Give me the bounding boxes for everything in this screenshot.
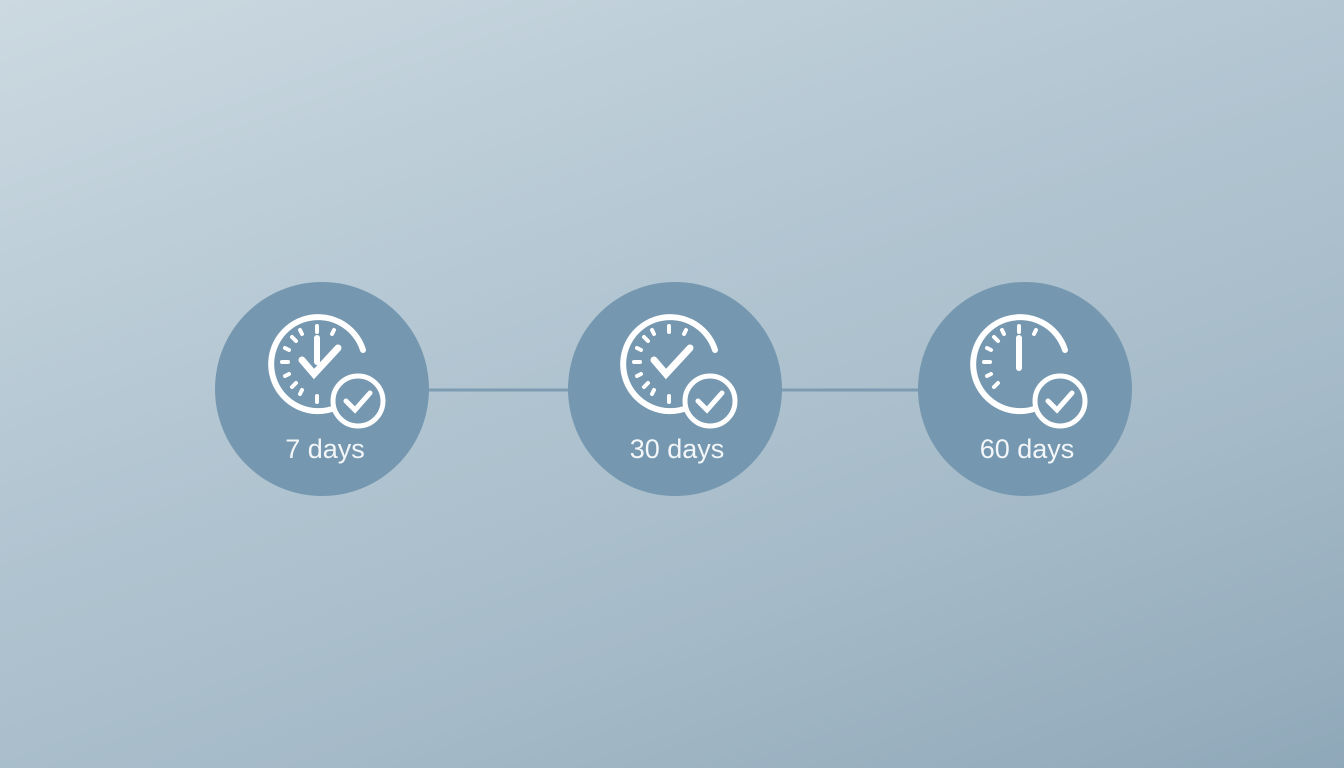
step: 7 days — [215, 282, 429, 496]
label: 60 days — [980, 434, 1074, 464]
label: 7 days — [285, 434, 365, 464]
icon: clock with check — [973, 317, 1085, 426]
step: 30 days — [568, 282, 782, 496]
step: 60 days — [918, 282, 1132, 496]
connector line 1 — [428, 388, 570, 392]
icon: clock with check — [271, 317, 383, 426]
icon: clock with check — [623, 317, 735, 426]
label: 30 days — [630, 434, 724, 464]
connector line 2 — [780, 388, 920, 392]
